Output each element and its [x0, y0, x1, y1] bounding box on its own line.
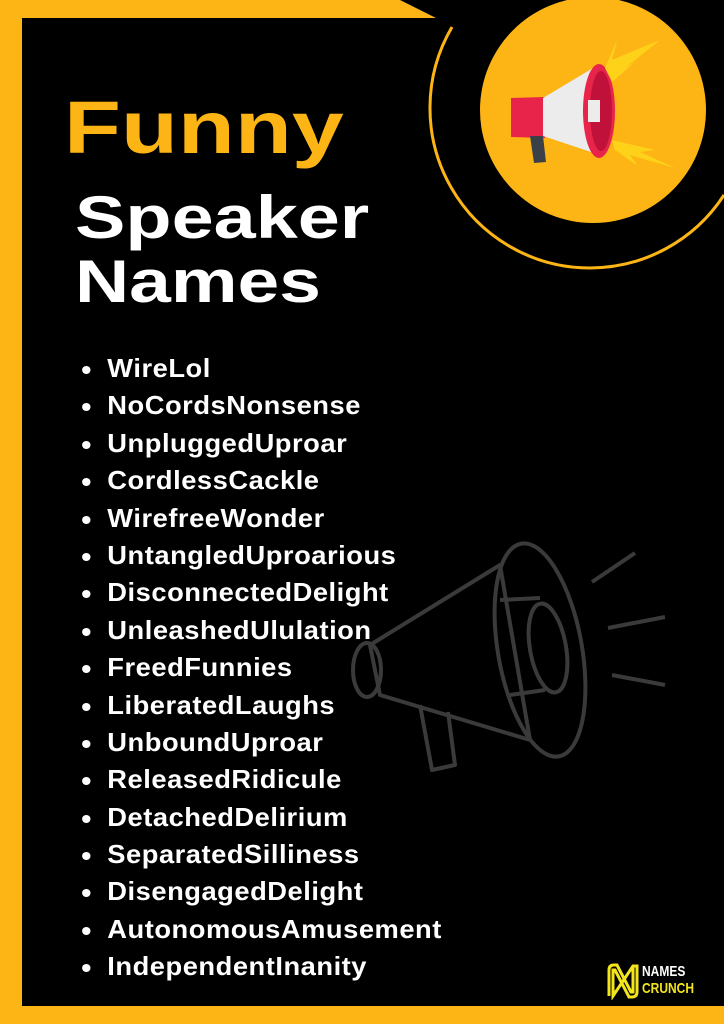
outer arc ring	[430, 27, 724, 268]
title: Funny: Funny	[64, 86, 344, 169]
logo: Names Crunch: NAMES	[642, 963, 685, 980]
names list: ReleasedRidicule	[107, 764, 342, 794]
names list: AutonomousAmusement	[107, 914, 442, 944]
names list: WireLol	[107, 353, 211, 383]
logo: Names Crunch: CRUNCH	[642, 980, 694, 997]
names list: CordlessCackle	[107, 465, 320, 495]
outline megaphone icon	[353, 536, 665, 770]
names list: DetachedDelirium	[107, 802, 348, 832]
names list: DisengagedDelight	[107, 876, 363, 906]
names list: WirefreeWonder	[107, 503, 325, 533]
title: Speaker: Speaker	[75, 184, 369, 251]
names list: DisconnectedDelight	[107, 577, 389, 607]
title: Names: Names	[75, 248, 321, 315]
names list: UntangledUproarious	[107, 540, 396, 570]
names list: UnboundUproar	[107, 727, 323, 757]
names list	[82, 353, 442, 981]
yellow circle with megaphone	[480, 0, 706, 223]
names list: UnleashedUlulation	[107, 615, 372, 645]
names list: SeparatedSilliness	[107, 839, 360, 869]
names list: IndependentInanity	[107, 951, 367, 981]
names list: FreedFunnies	[107, 652, 293, 682]
names list: LiberatedLaughs	[107, 690, 335, 720]
names list: UnpluggedUproar	[107, 428, 347, 458]
names list: NoCordsNonsense	[107, 390, 361, 420]
logo: Names Crunch	[608, 963, 694, 1000]
